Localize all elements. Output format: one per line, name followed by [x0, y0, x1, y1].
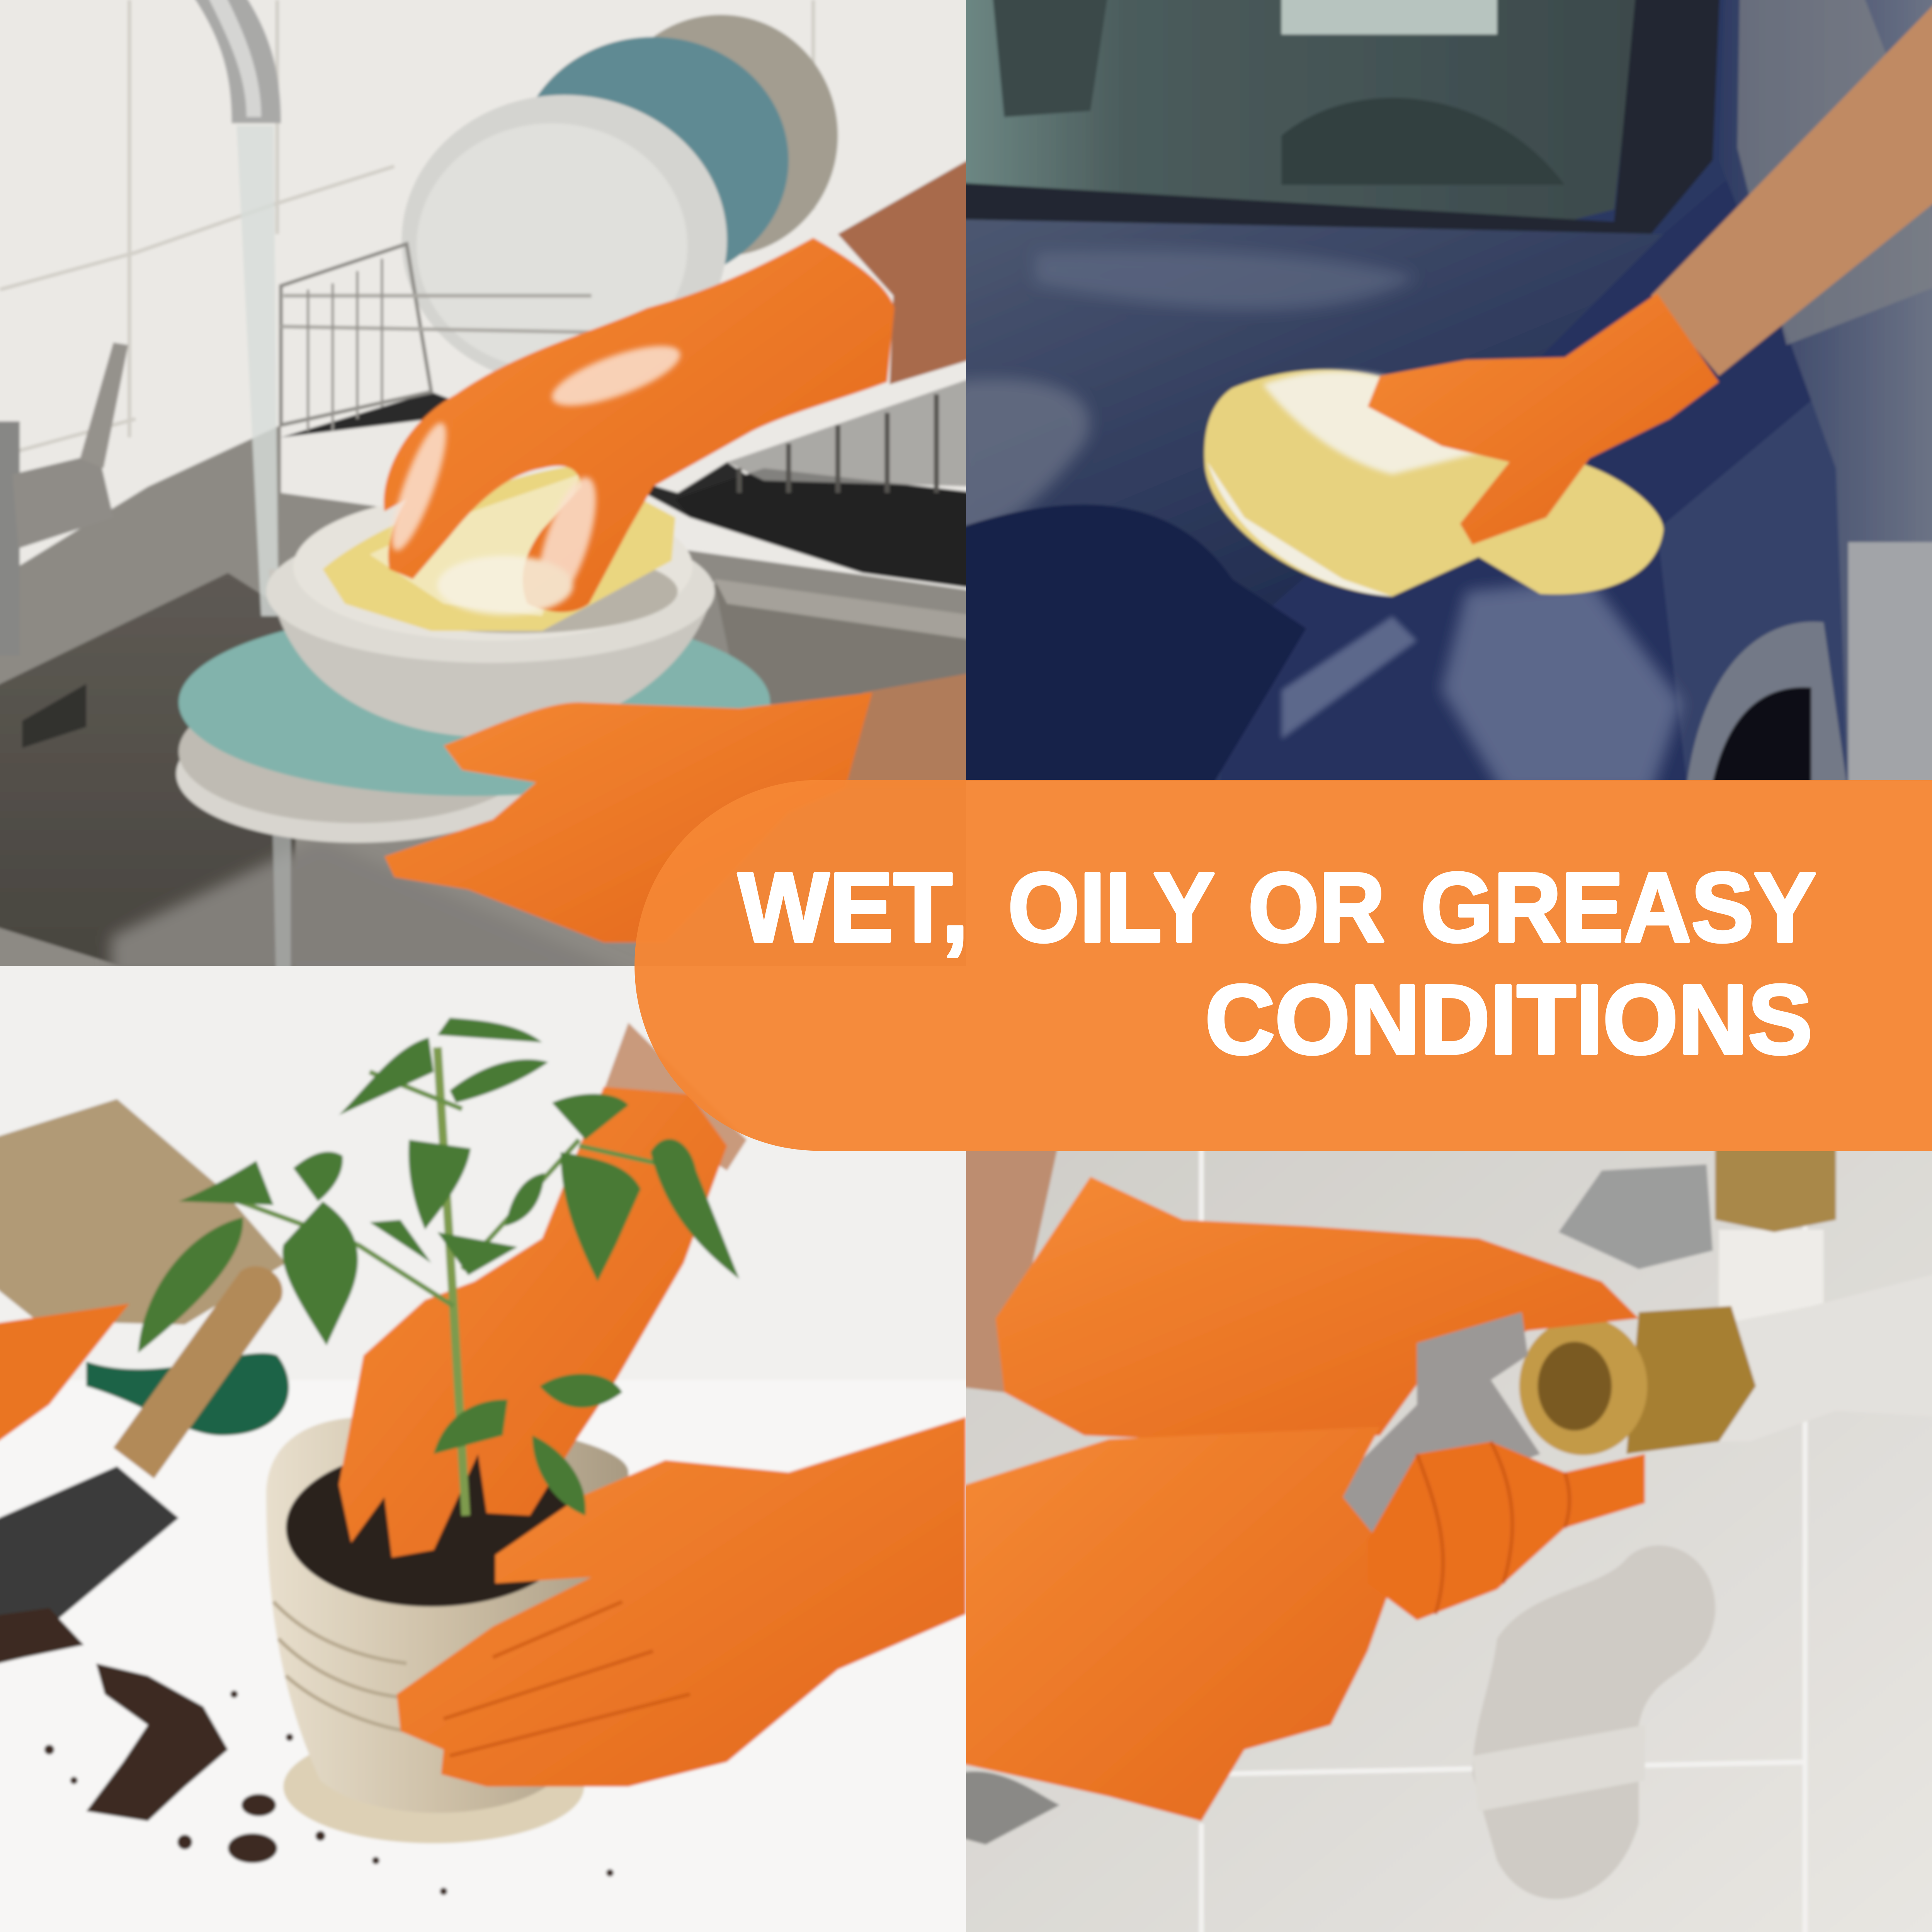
sponge: [1204, 370, 1663, 596]
panel: plumbing: [954, 1138, 1932, 1932]
sink counter: [0, 425, 978, 978]
heading: CONDITIONS: [1205, 964, 1813, 1075]
heading: [738, 852, 1816, 1075]
soil scatter: [0, 1608, 614, 1895]
icon: faucet: [0, 0, 281, 655]
panel: washing car: [954, 0, 1932, 794]
table surface: [0, 1380, 978, 1932]
lower glove: [954, 1427, 1398, 1821]
soil in pot: [286, 1449, 577, 1607]
pot ribbing: [274, 1602, 406, 1731]
car fender: [1220, 160, 1848, 794]
wall tile joints: [0, 0, 813, 456]
back glove: [339, 1087, 727, 1558]
windshield frame: [954, 0, 1720, 234]
plant pot: [266, 1417, 628, 1813]
sponge: [323, 466, 675, 631]
front glove: [397, 1417, 966, 1787]
wheel arch: [1685, 622, 1848, 794]
plant stem and leaves: [138, 1018, 739, 1515]
car hood: [954, 219, 1663, 641]
forearm skin: [1651, 0, 1932, 376]
wrench: [1312, 1312, 1540, 1540]
heading: OR: [1248, 852, 1385, 963]
banner background: [634, 780, 1932, 1151]
shutoff valve: [1559, 1164, 1713, 1269]
heading: OILY: [1008, 852, 1215, 963]
plates in rack: [402, 15, 838, 386]
wrench ring at handle end: [954, 1771, 1060, 1845]
upper orange glove: [384, 238, 895, 612]
door and side panel: [1719, 0, 1932, 794]
small orange glove: [0, 1304, 129, 1449]
dish rack: [281, 244, 978, 589]
white pipes: [1473, 1230, 1932, 1899]
foam on glove: [382, 334, 687, 615]
forearm skin upper: [838, 154, 978, 384]
panel: washing dishes: [0, 0, 978, 978]
upper glove: [996, 1177, 1639, 1442]
front glove finger creases: [444, 1602, 690, 1756]
saucer: [283, 1730, 584, 1843]
stacked plates and bowls: [176, 493, 770, 843]
wet reflections on hood: [1281, 579, 1682, 794]
lower orange glove: [384, 692, 872, 942]
sink basin: [0, 573, 296, 978]
forearm skin: [604, 1023, 747, 1170]
heading: GREASY: [1421, 852, 1816, 963]
wall tile joints: [1201, 1138, 1805, 1932]
green strap: [86, 1353, 289, 1435]
curled fingers: [1368, 1442, 1645, 1620]
forearm skin: [954, 1138, 1060, 1392]
brass top fitting: [1715, 1143, 1836, 1232]
heading: WET,: [738, 852, 968, 963]
water stream: [236, 126, 279, 616]
windshield: [954, 0, 1639, 228]
banner: [634, 780, 1932, 1151]
brass fitting: [1519, 1306, 1756, 1455]
panel: planting: [0, 954, 978, 1932]
orange glove: [1368, 293, 1719, 544]
trowel: [0, 1266, 282, 1668]
finger creases: [1417, 1442, 1570, 1614]
forearm skin lower: [845, 672, 978, 789]
burlap bag: [0, 1099, 286, 1325]
